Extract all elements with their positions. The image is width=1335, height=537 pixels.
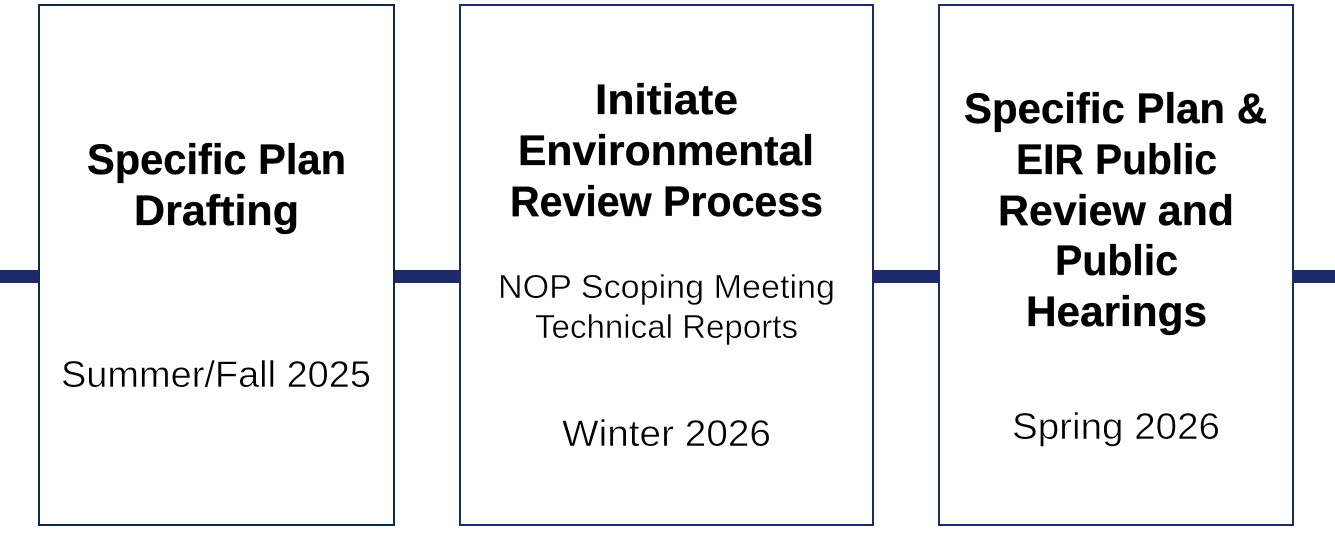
heading: initiate environmental review process: Initiate — [595, 76, 738, 124]
heading: specific plan and eir public review and public hearings: Review and — [998, 187, 1234, 235]
date: winter 2026: Winter 2026 — [562, 413, 771, 454]
heading: initiate environmental review process: Environmental — [518, 127, 814, 175]
heading: specific plan and eir public review and public hearings — [964, 85, 1267, 336]
panel frame 2 — [460, 5, 873, 525]
heading: specific plan and eir public review and public hearings: Hearings — [1026, 288, 1207, 336]
heading: specific plan and eir public review and public hearings: EIR Public — [1016, 136, 1217, 184]
date: spring 2026: Spring 2026 — [1012, 406, 1220, 447]
heading: initiate environmental review process: Review Process — [510, 178, 823, 226]
heading: specific plan and eir public review and public hearings: Public — [1055, 237, 1178, 285]
heading: specific plan drafting — [87, 136, 346, 235]
heading: specific plan drafting: Drafting — [134, 187, 299, 235]
panel frame 3 — [939, 5, 1293, 525]
timeline connector line — [0, 270, 1335, 283]
details: scoping meeting and technical reports: NOP Scoping Meeting — [498, 268, 835, 305]
details: scoping meeting and technical reports — [498, 268, 835, 345]
panel: environmental review — [460, 5, 873, 525]
panel frame 1 — [39, 5, 394, 525]
date: summer/fall 2025: Summer/Fall 2025 — [61, 354, 371, 395]
heading: specific plan drafting: Specific Plan — [87, 136, 346, 184]
panel: specific plan drafting — [39, 5, 394, 525]
heading: specific plan and eir public review and public hearings: Specific Plan & — [964, 85, 1267, 133]
heading: initiate environmental review process — [510, 76, 823, 226]
panel: public review and hearings — [939, 5, 1293, 525]
details: scoping meeting and technical reports: Technical Reports — [535, 308, 798, 345]
